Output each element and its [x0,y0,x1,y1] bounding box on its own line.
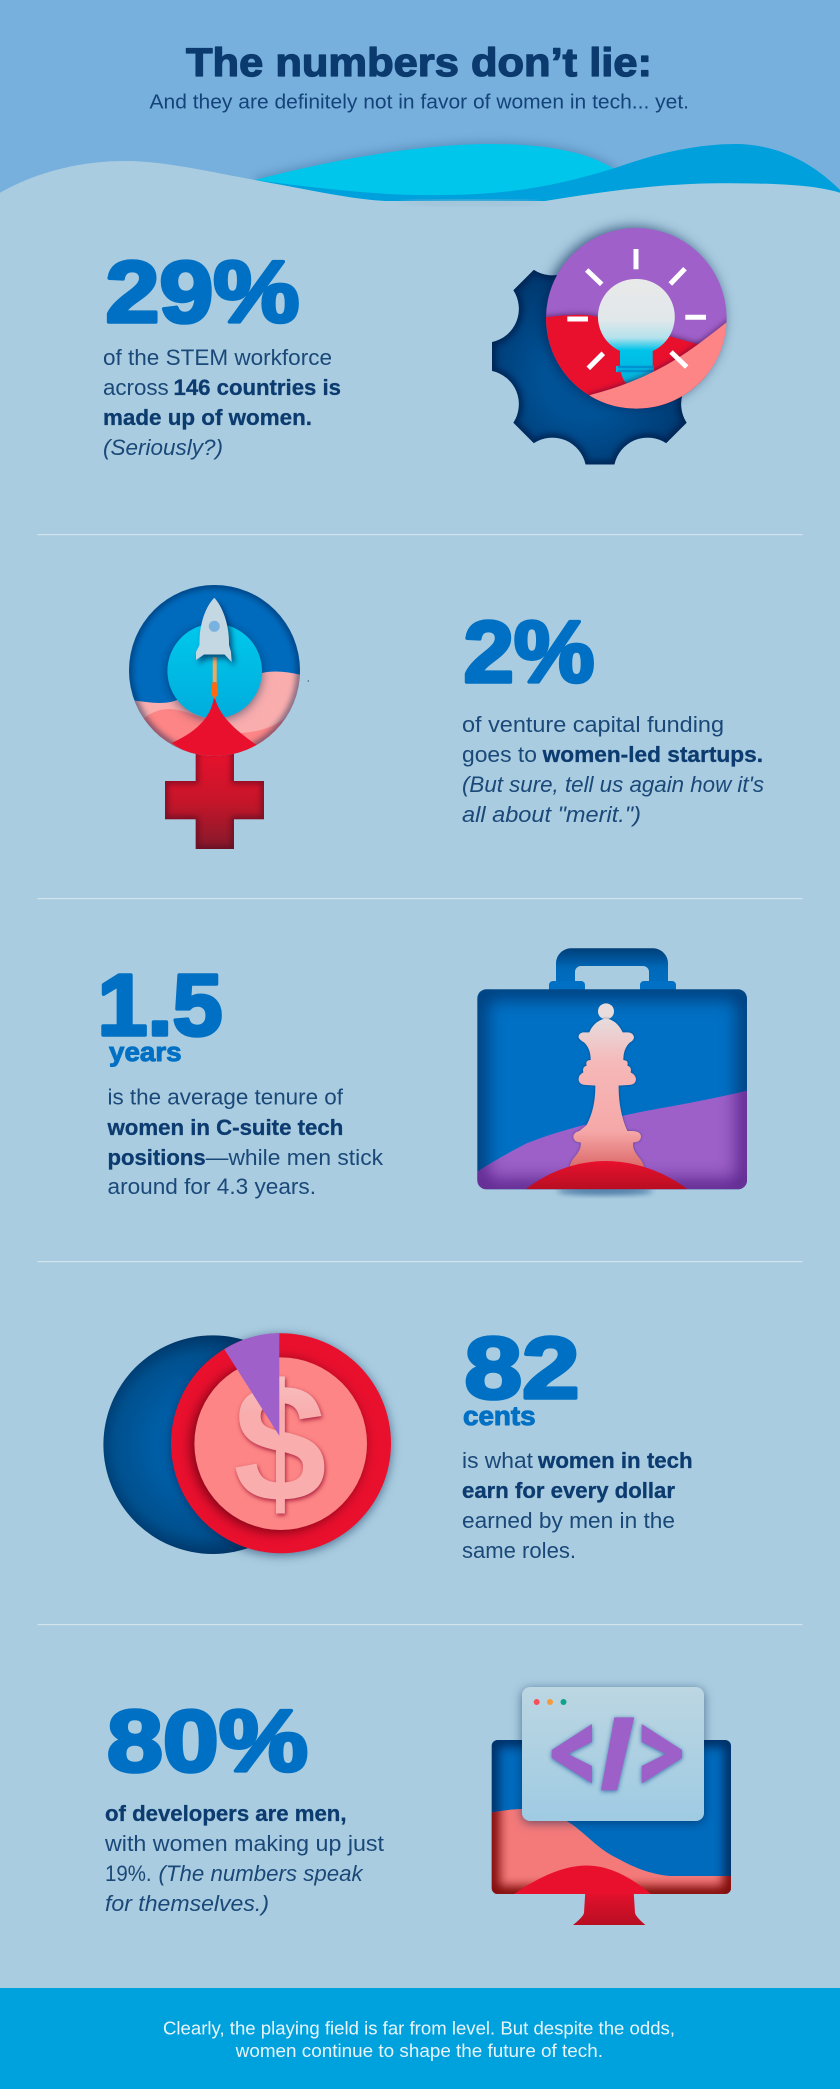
description 29%: 146 countries is [174,375,341,400]
stat: 82 cents [462,1320,693,1563]
icon: female symbol with rocket [125,580,309,849]
divider [38,898,802,899]
divider [38,534,802,535]
description 29%: (Seriously?) [103,435,223,460]
divider [38,1624,802,1625]
description 82 cents [462,1448,693,1563]
description 1.5 years: women in C-suite tech [106,1115,343,1140]
monitor stand [573,1890,645,1925]
icon: briefcase with chess queen [477,948,747,1195]
icon: gear with light bulb [492,220,740,464]
description 29%: across [103,375,169,400]
description 1.5 years: positions [108,1145,206,1170]
footer text: Clearly, the playing field is far from level. But despite the odds, [163,2018,675,2039]
icon: monitor with code window [492,1687,731,1925]
case shadow [557,1187,653,1195]
stat: 29 percent [103,244,341,460]
footer text: women continue to shape the future of tech. [235,2040,603,2061]
stem and cross [165,750,264,849]
back circle [103,1335,322,1554]
description 80%: for themselves.) [105,1891,269,1916]
description 1.5 years: —while men stick [206,1145,384,1170]
description 29% [103,345,341,460]
description 2% [462,712,764,827]
description 80%: of developers are men, [105,1801,346,1826]
stat: 80 percent [104,1693,384,1916]
description 80%: 19%. [105,1861,152,1886]
description 1.5 years: is the average tenure of [108,1085,344,1110]
description 82 cents: is what [462,1448,533,1473]
description 2%: goes to [462,742,537,767]
light rays [567,249,706,368]
subtitle: And they are definitely not in favor of women in tech... yet. [150,92,689,114]
circle [125,580,305,760]
rocket [196,598,232,662]
inner cyan circle [167,624,262,718]
description 1.5 years [106,1085,384,1199]
big number 29%: 29% [106,244,300,341]
queen piece [569,1003,644,1168]
description 82 cents: earned by men in the [462,1508,675,1533]
description 29%: made up of women. [103,405,312,430]
red mound [526,1161,688,1189]
code window [522,1687,704,1821]
dollar sign: $ [233,1349,327,1537]
bulb [598,279,675,392]
description 82 cents: earn for every dollar [462,1478,675,1503]
stat: 2 percent [462,604,764,827]
case body [477,989,747,1189]
description 2%: of venture capital funding [462,712,724,737]
description 2%: (But sure, tell us again how it's [462,772,764,797]
description 80%: with women making up just [104,1831,384,1856]
title: The numbers don’t lie: [186,41,652,85]
red ring [171,1333,391,1553]
monitor screen [492,1740,731,1894]
icon: dollar coin [103,1333,391,1554]
purple wedge [224,1333,279,1436]
description 1.5 years: around for 4.3 years. [108,1174,316,1199]
big number 1.5: 1.5 [98,957,222,1054]
big number 82: 82 [464,1320,580,1417]
description 2%: women-led startups. [542,742,763,767]
divider [38,1261,802,1262]
unit years: years [109,1037,182,1067]
description 82 cents: same roles. [462,1538,576,1563]
gear [492,270,687,464]
lightbulb disc [538,218,732,413]
pink disc [194,1357,367,1530]
footer band [0,1988,840,2089]
footer text [163,2018,675,2061]
description 29%: of the STEM workforce [103,345,332,370]
handle [549,948,676,993]
unit cents: cents [463,1401,536,1431]
stat: 1.5 years [98,957,384,1199]
description 2%: all about "merit.") [462,802,641,827]
code symbol [552,1717,682,1790]
description 80% [104,1801,384,1916]
flame trail [172,698,256,756]
big number 80%: 80% [107,1693,308,1790]
description 82 cents: women in tech [537,1448,693,1473]
window dots [534,1699,566,1705]
description 80%: (The numbers speak [158,1861,364,1886]
big number 2%: 2% [464,604,594,701]
